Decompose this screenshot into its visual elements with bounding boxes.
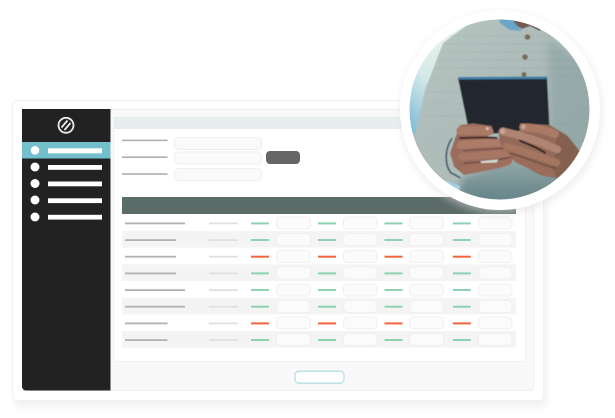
- shaded sweater at right: [547, 42, 590, 150]
- table header: [122, 197, 516, 214]
- menu item 4: [30, 196, 102, 204]
- menu item 3: [30, 179, 102, 188]
- photo badge: circle frame: [400, 10, 602, 214]
- row stripes: [122, 231, 516, 348]
- table rows: [122, 217, 516, 348]
- sleeve: [457, 174, 462, 180]
- right hand: [498, 123, 580, 178]
- form: filter fields: [122, 138, 262, 180]
- button: search: [266, 151, 300, 164]
- panel: application window: [22, 110, 534, 390]
- menu item 5: [30, 212, 102, 222]
- background at left: [410, 26, 466, 134]
- outer card: [12, 100, 547, 408]
- column: secondary values: [209, 222, 238, 341]
- collar and neck: [513, 20, 541, 32]
- tablet: [458, 76, 550, 136]
- button: bottom action: [295, 371, 344, 383]
- buttons: [522, 34, 530, 77]
- photo: hands holding a tablet: [410, 20, 590, 200]
- status lines: green: [251, 222, 471, 341]
- sweater: [413, 20, 590, 192]
- icon: logo: [58, 118, 74, 133]
- panel: content area: [114, 117, 526, 362]
- cuff: [446, 138, 461, 178]
- lower sweater: [456, 160, 559, 200]
- value boxes: [276, 217, 512, 346]
- column: names: [125, 222, 185, 341]
- menu item: active: [22, 142, 110, 158]
- menu item 2: [30, 162, 102, 172]
- hands: [446, 123, 580, 178]
- panel: sidebar: [22, 109, 110, 390]
- sweater knit stripes: [450, 36, 452, 37]
- left hand: [450, 123, 517, 175]
- status lines: red: [251, 256, 471, 324]
